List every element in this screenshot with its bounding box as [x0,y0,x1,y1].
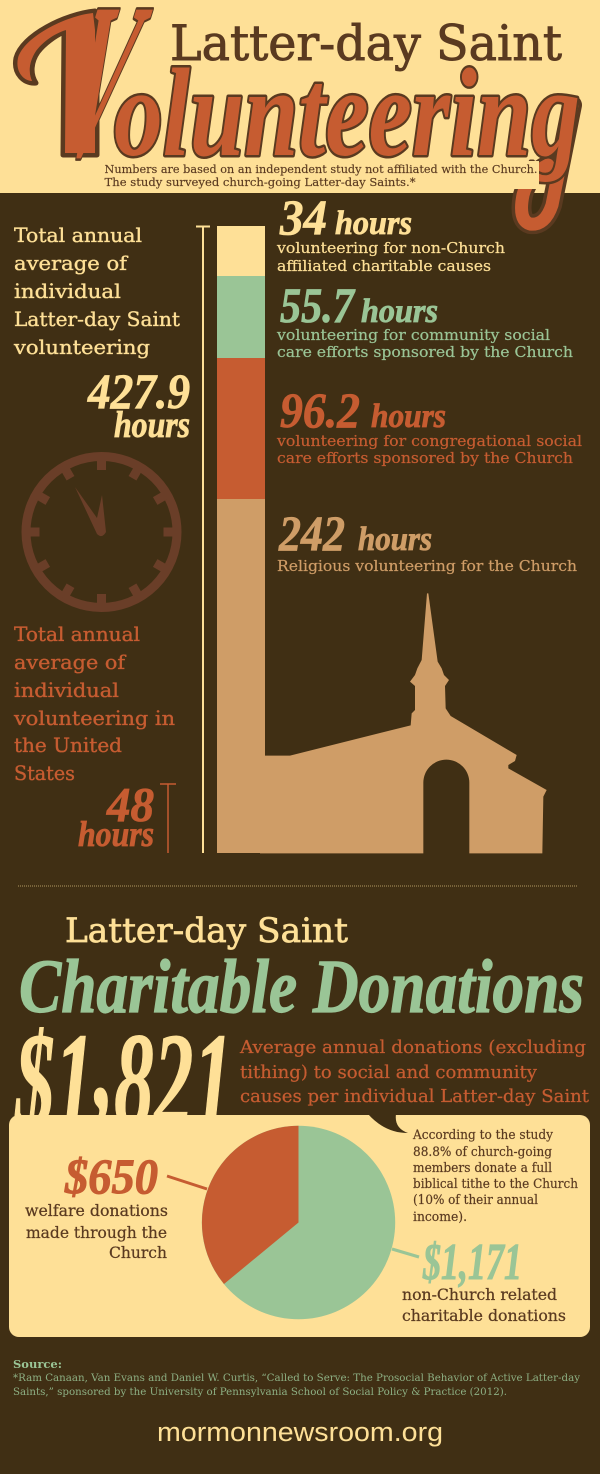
US scale line [160,784,176,853]
swash: V left curl [16,11,97,155]
leader line: non-Church [392,1249,419,1257]
stat block: 34 hours: 34 [279,189,327,245]
stat description: causes per individual Latter-day Saint [240,1086,590,1107]
label: non-Church donations: charitable donations [402,1306,566,1325]
stat block: 242 hours: 242 [278,505,345,561]
callout text: According to the study [412,1128,554,1143]
stat block: 34 hours: affiliated charitable causes [277,257,491,275]
left text: US annual average: volunteering in [13,707,175,730]
footer website: mormonnewsroom.org [157,1417,443,1447]
label: welfare donations: welfare donations [25,1201,168,1220]
stat block: 34 hours: hours [335,205,412,242]
pie chart [202,1126,395,1319]
callout text: biblical tithe to the Church [413,1177,579,1192]
label: welfare donations [25,1201,168,1262]
left text: US annual average: the United [14,734,122,757]
stat description [239,1037,590,1107]
callout text: (10% of their annual [413,1193,538,1208]
pie slice: non-Church donations [202,1126,395,1319]
callout text: income). [413,1210,467,1225]
source note: Source: [13,1358,62,1371]
pie slice: welfare donations [202,1126,298,1284]
callout text: members donate a full [413,1161,552,1176]
panel: donations breakdown [9,1114,590,1337]
stat block: 55.7 hours: care efforts sponsored by the Church [277,343,573,361]
source note: *Ram Canaan, Van Evans and Daniel W. Curtis, “Called to Serve: The Prosocial Behavior of Active Latter-day [13,1372,580,1384]
stat: 427.9 hours [87,363,190,446]
left text: LDS annual average: individual [14,280,121,303]
source note [13,1358,580,1398]
panel background [9,1115,590,1337]
callout text: 88.8% of church-going [413,1145,552,1160]
source note: Saints,” sponsored by the University of Pennsylvania School of Social Policy & Practice (2012). [13,1386,507,1398]
stat block: 96.2 hours: volunteering for congregational social [276,432,582,450]
LDS scale line [196,226,210,853]
label: welfare donations: made through the [26,1223,167,1242]
title line: Latter-day Saint: Latter-day Saint [170,15,562,72]
label: non-Church donations: non-Church related [402,1285,557,1304]
stat block: 242 hours: hours [358,521,432,558]
label: welfare donations: Church [109,1243,167,1262]
stat: 48 hours: 48 [106,777,154,832]
bar segment: religious volunteering [217,499,265,853]
stat: 427.9 hours: 427.9 [87,363,190,419]
stat block: 55.7 hours: volunteering for community social [276,326,550,344]
intro note: The study surveyed church-going Latter-day Saints.* [104,175,416,189]
heading: Latter-day Saint: Latter-day Saint [65,911,348,951]
left text: LDS annual average: Total annual [14,224,142,247]
stat: 48 hours: hours [78,814,154,854]
left text: LDS annual average: Latter-day Saint [14,308,180,331]
left text: LDS annual average: average of [14,252,129,275]
bar segment: community social care [217,276,265,358]
stat description: tithing) to social and community [240,1062,538,1083]
stat block: 242 hours: Religious volunteering for the Church [277,557,577,575]
swash: V stem fill [17,13,95,153]
stat: $1,821: 821 [114,1006,233,1156]
icon: clock [26,456,178,608]
stat block: 34 hours [276,189,505,275]
stat: $1,171: $1,171 [422,1234,522,1291]
stat block: 96.2 hours [276,382,582,467]
left text: LDS annual average: volunteering [13,336,150,359]
stat: 427.9 hours: hours [114,405,190,446]
left text: US annual average [13,623,175,785]
intro note [104,162,538,189]
left text: US annual average: average of [14,651,127,674]
stat block: 55.7 hours: hours [361,293,438,330]
stat: $1,821: $1 [15,1006,151,1156]
stat block: 34 hours: volunteering for non-Church [276,239,505,257]
stat block: 96.2 hours: care efforts sponsored by the Church [277,449,573,467]
callout text [412,1128,579,1225]
intro note: Numbers are based on an independent study not affiliated with the Church. [104,162,538,176]
label: non-Church donations [402,1285,566,1325]
left text: LDS annual average [13,224,180,359]
bar segment: non-Church causes [217,226,265,276]
bar segment: congregational social care [217,358,265,499]
stat block: 242 hours [277,505,577,575]
title [16,0,580,224]
callout tail [368,1114,408,1133]
stat block: 96.2 hours: hours [371,398,446,435]
swash: g descender [522,105,572,224]
left text: US annual average: Total annual [14,623,140,646]
stat block: 96.2 hours: 96.2 [280,382,360,438]
stat: $1,821: , [93,988,114,1138]
stacked bar [217,226,265,853]
left text: US annual average: individual [14,679,119,702]
stat: $650: $650 [64,1148,158,1204]
stat: 48 hours [78,777,154,854]
stat block: 55.7 hours: 55.7 [280,277,356,333]
stat block: 55.7 hours [276,277,573,361]
header band [0,0,600,193]
icon: church silhouette [260,593,547,853]
leader line: welfare [167,1176,207,1189]
left text: US annual average: States [14,762,75,785]
stat description: Average annual donations (excluding [239,1037,586,1058]
